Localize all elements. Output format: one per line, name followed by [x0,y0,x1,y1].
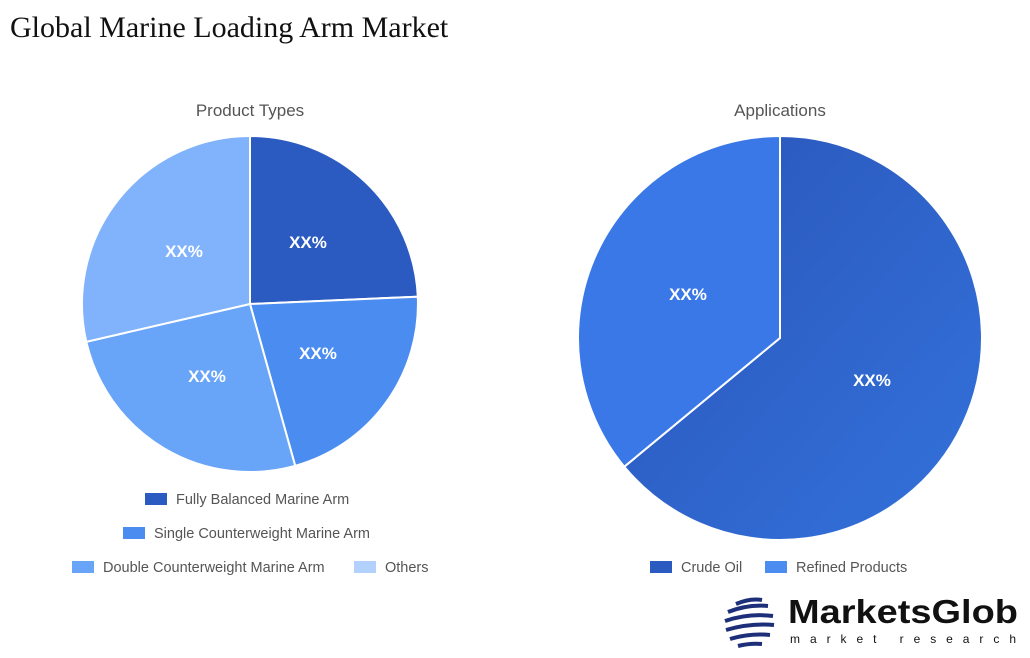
legend: applications: Crude Oil [681,560,742,576]
legend: applications: Refined Products [796,560,907,576]
logo: MarketsGlob [788,593,1018,630]
pie chart: applications: XX% [853,371,891,390]
heading: product types: Product Types [196,101,304,120]
legend: product types: Double Counterweight Marine Arm [103,560,325,576]
title: Global Marine Loading Arm Market [10,11,448,44]
legend: product types: Fully Balanced Marine Arm [176,492,349,508]
logo: market research [790,632,1016,646]
pie chart: applications: XX% [669,285,707,304]
pie chart: product types: XX% [165,242,203,261]
pie chart: product types [82,136,418,472]
pie chart: product types: XX% [188,367,226,386]
pie chart: applications [578,136,982,540]
legend: applications [650,560,907,576]
pie chart: product types: XX% [299,344,337,363]
legend: product types: Others [385,560,429,576]
pie chart: product types: XX% [289,233,327,252]
legend: product types [72,492,429,576]
legend: product types: Single Counterweight Marine Arm [154,526,370,542]
heading: applications: Applications [734,101,826,120]
logo [725,593,1018,646]
